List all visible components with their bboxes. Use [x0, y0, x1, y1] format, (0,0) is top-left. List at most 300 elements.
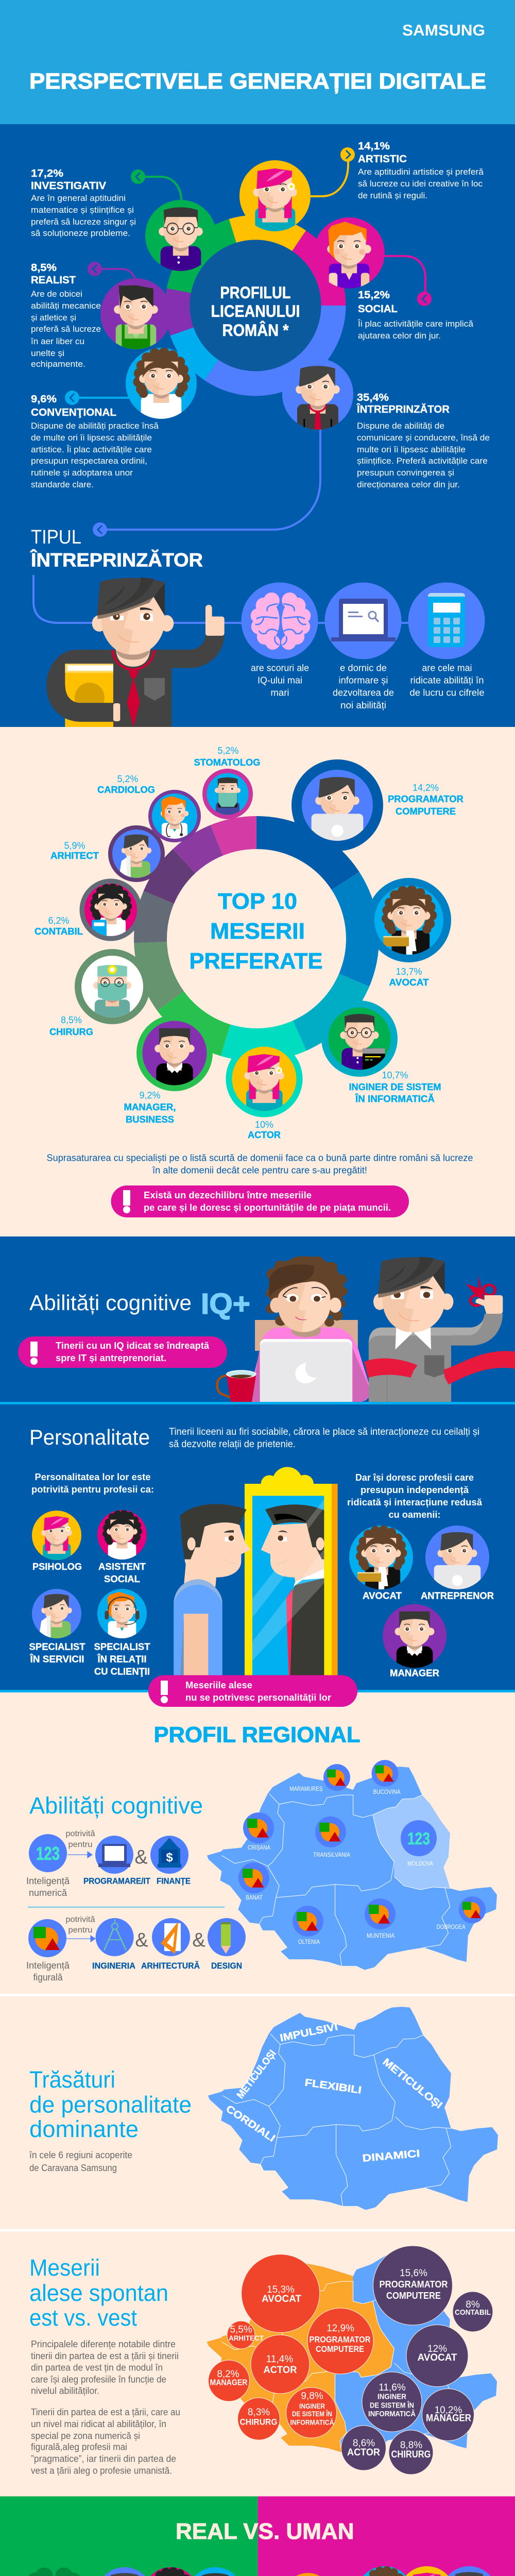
text block: investigativ: matematice și științifice și — [31, 205, 134, 215]
labels: bubbles east vest: 8,2% — [217, 2369, 239, 2380]
labels: top 10 occupations: 5,2% — [117, 774, 139, 784]
labels: bubbles east vest: CHIRURG — [240, 2417, 277, 2427]
text block: conventional: standarde clare. — [31, 480, 94, 489]
labels: top 10 occupations: AVOCAT — [389, 977, 429, 988]
label: inteligenta figurala: Inteligență — [26, 1960, 70, 1971]
icon: avatars uman — [356, 2566, 497, 2576]
text block: isi doresc profesii: ridicată și interacțiune redusă — [347, 1497, 483, 1507]
icon: avatar manager — [136, 1015, 213, 1092]
labels: bubbles east vest: DE SISTEM ÎN — [292, 2409, 332, 2418]
labels: top 10 occupations: 9,2% — [139, 1090, 161, 1100]
panel: profil regional abilitati cognitive — [0, 1692, 515, 1994]
icon: avatar contabil — [79, 879, 142, 941]
heading: trasaturi: de personalitate — [29, 2092, 192, 2117]
heading: meserii alese spontan: Meserii — [29, 2255, 100, 2281]
labels: bubbles east vest: CONTABIL — [455, 2308, 491, 2317]
text block: trait iq: are scoruri ale — [251, 663, 309, 673]
labels: profesii: AVOCAT — [363, 1591, 402, 1601]
text block: realist — [30, 262, 101, 369]
labels: bubbles east vest: AVOCAT — [417, 2352, 457, 2363]
labels: top 10 occupations: CHIRURG — [49, 1027, 93, 1037]
heading: tipul intreprinzator: ÎNTREPRINZĂTOR — [30, 549, 203, 571]
text block: potrivita pentru profesii — [31, 1472, 154, 1495]
map: east vs west — [207, 2253, 497, 2456]
text block: artistic: să lucreze cu idei creative în loc — [358, 179, 483, 189]
icon: IQ brain real — [21, 2568, 87, 2576]
heading: meserii alese spontan: est vs. vest — [29, 2304, 137, 2331]
labels: bubbles east vest: ACTOR — [347, 2447, 380, 2458]
text block: trait cifre: de lucru cu cifrele — [410, 687, 484, 698]
labels: bubbles east vest: 15,6% — [400, 2268, 427, 2279]
map: personality traits: METICULOȘI — [381, 2056, 444, 2111]
labels: top 10 occupations: 5,2% — [217, 745, 239, 756]
text block: diferente: tinerii din partea de est a țării și tinerii — [31, 2351, 179, 2361]
chart: east bubbles — [341, 2246, 493, 2475]
arrow: figural to jobs — [66, 1936, 95, 1942]
labels: top 10 occupations: ÎN INFORMATICĂ — [355, 1093, 435, 1104]
panel: header — [0, 0, 515, 124]
text block: diferente: Tinerii din partea de est a țării, care au — [31, 2407, 180, 2417]
labels: inginerie arhitectura design — [92, 1961, 242, 1971]
text block: intreprinzator: științifice. Preferă activitățile care — [357, 456, 488, 466]
map: romania cognitive regions: MARAMUREȘ — [289, 1785, 322, 1792]
icon: avatar cardiolog — [148, 790, 201, 843]
text block: social: Îi plac activitățile care implică — [357, 319, 474, 329]
labels: bubbles east vest: 15,3% — [267, 2284, 295, 2295]
text block: realist: preferă să lucreze — [31, 324, 101, 334]
labels: top 10 occupations: COMPUTERE — [396, 806, 456, 817]
text: potrivita pentru 2: pentru — [68, 1926, 93, 1935]
panel: trasaturi de personalitate — [0, 1996, 515, 2229]
map: romania cognitive regions: CRIȘANA — [248, 1844, 270, 1851]
labels: bubbles east vest: MANAGER — [210, 2379, 248, 2387]
icon: avatar avocat — [349, 1525, 413, 1596]
icon: avatar intreprinzator — [282, 359, 353, 436]
text block: diferente: un nivel mai ridicat al abilităților, în — [31, 2419, 166, 2429]
map: romania cognitive regions: BANAT — [246, 1894, 263, 1901]
text block: artistic — [358, 141, 484, 200]
labels: bubbles east vest: PROGRAMATOR — [309, 2334, 371, 2344]
text block: social: SOCIAL — [358, 303, 398, 315]
heading: meserii alese spontan — [29, 2255, 168, 2331]
text block: tinerii liceeni: Tinerii liceeni au firi sociabile, cărora le place să interacționeze cu ceilalți și — [169, 1427, 479, 1437]
icon: avatar social — [314, 217, 385, 296]
text block: intreprinzator: ÎNTREPRINZĂTOR — [356, 403, 450, 415]
chart: profile donut — [177, 228, 334, 383]
text block: realist: echipamente. — [31, 359, 85, 369]
text block: diferente: care își aleg profesiile în funcție de — [31, 2374, 166, 2384]
icon: programare laptop — [95, 1836, 133, 1874]
text block: trait iq — [251, 663, 309, 698]
heading: profilul liceanului — [211, 283, 300, 340]
text block: tinerii liceeni: să dezvolte relații de prietenie. — [169, 1439, 296, 1450]
arrow: connectors — [72, 155, 425, 530]
labels: profesii: MANAGER — [390, 1668, 439, 1679]
labels: top 10 occupations: 6,2% — [48, 916, 70, 926]
text block: trait informare: noi abilități — [340, 700, 386, 710]
label: inteligenta numerica: numerică — [29, 1888, 67, 1898]
text block: artistic: 14,1% — [358, 141, 390, 152]
text: potrivita pentru 1: potrivită — [66, 1829, 95, 1838]
heading: abilitati cognitive: Abilități cognitive — [29, 1792, 203, 1819]
labels: top 10 occupations: CONTABIL — [35, 926, 83, 937]
panel: top 10 meserii preferate — [0, 727, 515, 1236]
labels: bubbles east vest: DE SISTEM ÎN — [370, 2401, 414, 2410]
logo: Samsung: SAMSUNG — [402, 21, 485, 39]
panel: meserii alese spontan — [0, 2232, 515, 2497]
labels: profesii: ÎN SERVICII — [29, 1654, 84, 1664]
icon: avatar artistic — [239, 160, 311, 236]
panel: profilul liceanului român — [0, 124, 515, 727]
icon: marker realist — [88, 262, 102, 276]
text block: intreprinzator: comunicare și conducere, însă de — [357, 433, 490, 443]
text block: regiuni acoperite — [29, 2150, 132, 2173]
text block: suprasaturare: în alte domenii decât cele pentru care s-au pregătit! — [152, 1164, 367, 1176]
labels: top 10 occupations: BUSINESS — [126, 1114, 174, 1125]
labels: bubbles east vest: 12% — [427, 2344, 447, 2354]
icon: marker investigativ — [131, 170, 145, 184]
text block: trait cifre: ridicate abilități în — [410, 675, 484, 685]
callout: IT si antreprenoriat — [18, 1336, 227, 1368]
icon: mirror with man and reflection — [174, 1467, 338, 1699]
labels: profesii: SPECIALIST — [29, 1641, 85, 1652]
text block: realist: unelte și — [31, 348, 64, 358]
text block: conventional: 9,6% — [31, 394, 57, 405]
text block: social — [357, 290, 474, 341]
text: ampersand 1: & — [134, 1846, 148, 1868]
labels: bubbles east vest: COMPUTERE — [316, 2344, 364, 2354]
icon: inteligenta figurala — [28, 1919, 66, 1957]
text: potrivita pentru 2 — [66, 1916, 95, 1935]
heading: abilitati cognitive: Abilități cognitive — [29, 1291, 192, 1315]
text block: suprasaturare — [46, 1152, 473, 1176]
labels: top 10 occupations: MANAGER, — [124, 1102, 176, 1112]
map: romania cognitive regions: 123 — [407, 1829, 430, 1848]
heading: IQ+: IQ+ — [201, 1287, 250, 1320]
labels: bubbles east vest: 5,5% — [230, 2325, 252, 2335]
heading: profilul liceanului: PROFILUL — [220, 283, 290, 302]
text block: social: ajutarea celor din jur. — [358, 331, 441, 341]
text block: investigativ: preferă să lucreze singur și — [31, 217, 136, 227]
text block: realist: 8,5% — [31, 262, 57, 274]
labels: top 10 occupations: 5,9% — [64, 841, 85, 851]
icon: avatar programator — [291, 759, 383, 851]
icon: avatar stomatolog — [202, 769, 253, 819]
labels: bubbles east vest: ACTOR — [264, 2365, 297, 2376]
chart: west bubbles — [208, 2255, 373, 2440]
heading: trasaturi — [29, 2066, 192, 2142]
labels: programare finante — [83, 1877, 191, 1886]
icon: inginerie compass — [96, 1918, 134, 1956]
icon: avatar inginer — [321, 1001, 398, 1077]
labels: bubbles east vest: ARHITECT — [229, 2334, 264, 2342]
text block: tinerii liceeni — [169, 1427, 479, 1450]
text block: trait informare — [333, 663, 394, 710]
heading: profilul liceanului: LICEANULUI — [211, 302, 300, 320]
arrow: numeric to jobs — [67, 1852, 92, 1858]
icon: avatar actor — [226, 1040, 303, 1117]
icon: brain — [241, 582, 318, 659]
icon: avatar realist — [100, 278, 171, 357]
text block: isi doresc profesii: Dar își doresc profesii care — [355, 1472, 474, 1483]
text block: conventional: CONVENŢIONAL — [31, 407, 116, 418]
text: ampersand 2: & — [135, 1929, 148, 1951]
labels: bubbles east vest: INFORMATICĂ — [290, 2418, 334, 2427]
map: romania cognitive regions: BUCOVINA — [373, 1788, 401, 1795]
text block: conventional: presupun respectarea ordinii, — [31, 456, 147, 466]
labels: bubbles east vest: 8,3% — [248, 2407, 270, 2418]
labels: inginerie arhitectura design: INGINERIA — [92, 1961, 135, 1971]
labels: bubbles east vest: INGINER — [299, 2402, 325, 2410]
labels: top 10 occupations — [35, 745, 464, 1140]
icon: avatar psiholog — [32, 1511, 81, 1564]
text block: trait informare: informare și — [339, 675, 388, 685]
labels: bubbles east vest: 8% — [466, 2299, 480, 2310]
arrow: line through traits — [33, 575, 408, 623]
text block: investigativ: Are în general aptitudini — [31, 193, 126, 203]
heading: real vs uman: REAL VS. UMAN — [176, 2519, 354, 2544]
panel: real vs uman — [0, 2496, 515, 2576]
icon: avatar chirurg — [75, 949, 150, 1024]
labels: bubbles east vest: 9,8% — [301, 2391, 323, 2402]
text block: realist: în aer liber cu — [30, 336, 84, 346]
labels: bubbles east vest: 11,6% — [379, 2382, 406, 2393]
callout: IT si antreprenoriat: Tinerii cu un IQ idicat se îndreaptă — [56, 1341, 210, 1351]
icon: avatar investigativ — [145, 200, 216, 275]
labels: profesii — [29, 1562, 494, 1679]
map: personality traits: FLEXIBILI — [304, 2077, 362, 2096]
labels: top 10 occupations: 13,7% — [396, 967, 422, 977]
heading: trasaturi: dominante — [29, 2116, 139, 2142]
icon: design pencil — [208, 1918, 246, 1956]
labels: bubbles east vest: 8,8% — [400, 2440, 422, 2451]
title: PERSPECTIVELE GENERAȚIEI DIGITALE — [29, 69, 486, 94]
map: romania cognitive regions: MOLDOVA — [407, 1860, 433, 1867]
labels: inginerie arhitectura design: DESIGN — [211, 1961, 242, 1971]
labels: top 10 occupations: ACTOR — [248, 1130, 281, 1140]
icon: avatar specialist relatii clienti — [97, 1589, 147, 1643]
heading: tipul intreprinzator: TIPUL — [31, 527, 81, 548]
map: romania cognitive regions: OLTENIA — [298, 1938, 320, 1945]
labels: bubbles east vest: 10,2% — [435, 2405, 462, 2416]
labels: top 10 occupations: PROGRAMATOR — [388, 794, 464, 804]
icon: avatar arhitect — [108, 825, 165, 882]
text block: conventional: Dispune de abilități practice însă — [31, 421, 159, 431]
labels: bubbles east vest: 11,4% — [266, 2354, 293, 2365]
text block: trait informare: dezvoltarea de — [333, 687, 394, 698]
labels: programare finante: PROGRAMARE/IT — [83, 1877, 150, 1886]
panel: abilitati cognitive iq — [0, 1236, 515, 1404]
text block: isi doresc profesii: presupun independență — [360, 1485, 469, 1495]
icon: arhitectura triangle — [152, 1918, 190, 1956]
panel: personalitate — [0, 1404, 515, 1699]
labels: profesii: ÎN RELAȚII — [97, 1654, 146, 1664]
text block: conventional: de multe ori îi lipsesc abilitățile — [31, 433, 152, 443]
callout: meseriile alese — [148, 1675, 357, 1707]
text block: trait cifre — [410, 663, 484, 698]
labels: profesii: PSIHOLOG — [32, 1562, 82, 1572]
labels: top 10 occupations: STOMATOLOG — [194, 757, 261, 768]
icon: marker social — [417, 292, 432, 306]
text block: diferente: din partea de vest țin de modul în — [31, 2363, 163, 2373]
heading: profilul liceanului: ROMÂN * — [222, 321, 289, 340]
text: potrivita pentru 1: pentru — [68, 1840, 93, 1849]
labels: bubbles east vest: 12,9% — [327, 2323, 354, 2334]
labels: bubbles east vest: CHIRURG — [391, 2449, 431, 2460]
text block: social: 15,2% — [358, 290, 390, 301]
text block: investigativ: INVESTIGATIV — [31, 180, 107, 192]
callout: IT si antreprenoriat: spre IT și antreprenoriat. — [56, 1353, 166, 1363]
text block: intreprinzator: 35,4% — [357, 392, 389, 403]
icon: marker artistic — [340, 147, 355, 162]
text: potrivita pentru 1 — [66, 1829, 95, 1849]
labels: bubbles east vest: MANAGER — [426, 2413, 471, 2424]
heading: trasaturi: Trăsături — [29, 2066, 115, 2093]
text block: regiuni acoperite: de Caravana Samsung — [29, 2163, 117, 2173]
icon: man cutting ribbon — [364, 1257, 515, 1402]
labels: profesii: CU CLIENŢII — [94, 1666, 150, 1676]
text block: artistic: de rutină și reguli. — [358, 191, 427, 200]
callout: dezechilibru: Există un dezechilibru între meseriile — [144, 1190, 312, 1200]
heading: personalitate: Personalitate — [29, 1425, 150, 1449]
text block: diferente: special pe zona numerică și — [31, 2431, 140, 2441]
text block: isi doresc profesii — [347, 1472, 483, 1520]
text block: diferente: Principalele diferențe notabile dintre — [31, 2339, 176, 2349]
text block: potrivita pentru profesii: potrivită pentru profesii ca: — [31, 1484, 154, 1495]
text block: suprasaturare: Suprasaturarea cu specialiști pe o listă scurtă de domenii face ca o bună parte dintre români să lucreze — [46, 1152, 473, 1163]
text block: regiuni acoperite: în cele 6 regiuni acoperite — [29, 2150, 132, 2160]
labels: bubbles east vest — [210, 2268, 491, 2460]
callout: dezechilibru — [111, 1185, 409, 1217]
text block: realist: și atletice și — [31, 313, 76, 323]
labels: profesii: ANTREPRENOR — [421, 1591, 494, 1601]
labels: top 10 occupations: 14,2% — [413, 783, 439, 793]
map: romania cognitive regions: TRANSILVANIA — [313, 1851, 350, 1858]
callout: meseriile alese: nu se potrivesc personalității lor — [185, 1692, 331, 1703]
icon: marker conventional — [65, 391, 79, 405]
heading: tipul intreprinzator — [30, 527, 203, 571]
text block: conventional: rutinele și adoptarea unor — [31, 468, 133, 478]
text: ampersand 3: & — [192, 1929, 205, 1951]
text block: realist: Are de obicei — [31, 289, 82, 299]
text block: intreprinzator: multe ori îi lipsesc abilitățile — [357, 445, 466, 454]
icon: inteligenta numerica — [29, 1834, 67, 1872]
label: inteligenta numerica — [26, 1876, 70, 1898]
icon: laptop — [324, 582, 402, 659]
text block: realist: abilități mecanice — [31, 301, 101, 311]
labels: top 10 occupations: ARHITECT — [50, 851, 99, 861]
text block: realist: REALIST — [31, 275, 76, 286]
icon: finante bank — [150, 1836, 188, 1874]
labels: top 10 occupations: 8,5% — [61, 1015, 82, 1025]
heading: top 10: TOP 10 — [218, 889, 297, 914]
map: personality traits: DINAMICI — [362, 2148, 420, 2164]
icon: avatar manager — [383, 1604, 447, 1675]
labels: bubbles east vest: PROGRAMATOR — [379, 2279, 448, 2290]
labels: top 10 occupations: 10% — [255, 1120, 273, 1130]
text block: diferente: ”pragmatice”, iar tinerii din partea de — [31, 2454, 176, 2464]
icon: inteligenta numerica: 123 — [36, 1843, 60, 1864]
labels: inginerie arhitectura design: ARHITECTURĂ — [141, 1961, 200, 1971]
map: romania cognitive regions: DOBROGEA — [437, 1923, 466, 1930]
icon: marker intreprinzator — [93, 522, 107, 537]
labels: top 10 occupations: INGINER DE SISTEM — [349, 1082, 441, 1092]
label: inteligenta figurala — [26, 1960, 70, 1982]
text block: conventional: artistice. Îi plac activitățile care — [31, 445, 152, 454]
heading: profil regional: PROFIL REGIONAL — [153, 1723, 360, 1748]
icon: avatar avocat — [367, 878, 451, 962]
map: personality traits — [208, 2007, 498, 2210]
map: romania cognitive regions: MUNTENIA — [367, 1932, 394, 1939]
labels: profesii: ASISTENT — [98, 1562, 146, 1572]
text block: intreprinzator: Dispune de abilități de — [357, 421, 444, 431]
callout: meseriile alese: Meseriile alese — [185, 1680, 252, 1690]
labels: profesii: SOCIAL — [104, 1574, 140, 1584]
icon: smiley uman — [284, 2573, 332, 2576]
heading: top 10: MESERII — [210, 919, 305, 944]
icon: big entrepreneur character — [46, 578, 225, 727]
heading: top 10: PREFERATE — [190, 948, 322, 974]
heading: meserii alese spontan: alese spontan — [29, 2280, 168, 2306]
icon: woman with laptop — [217, 1256, 371, 1402]
labels: bubbles east vest: COMPUTERE — [386, 2291, 441, 2301]
icon: calculator — [408, 582, 485, 659]
text block: trait informare: e dornic de — [340, 663, 387, 673]
icon: avatars real — [96, 2567, 244, 2576]
labels: bubbles east vest: INGINER — [377, 2393, 406, 2401]
icon: finante bank: $ — [166, 1851, 173, 1865]
map: personality traits: IMPULSIVI — [279, 2021, 339, 2044]
map: romania cognitive regions — [207, 1760, 497, 1970]
label: inteligenta numerica: Inteligență — [26, 1876, 70, 1886]
labels: bubbles east vest: INFORMATICĂ — [368, 2410, 416, 2418]
labels: top 10 occupations: 10,7% — [382, 1070, 408, 1080]
text block: diferente: nivelul abilităților. — [31, 2385, 99, 2396]
icon: avatar antreprenor — [425, 1526, 489, 1594]
labels: programare finante: FINANȚE — [157, 1877, 191, 1886]
text block: artistic: Are aptitudini artistice și preferă — [358, 167, 484, 177]
icon: avatar asistent social — [97, 1510, 147, 1565]
text block: isi doresc profesii: cu oamenii: — [388, 1510, 441, 1520]
text block: trait iq: mari — [271, 687, 289, 698]
labels: bubbles east vest: AVOCAT — [262, 2294, 301, 2304]
text block: investigativ — [31, 168, 136, 238]
map: personality traits: METICULOȘI — [235, 2048, 279, 2101]
text block: artistic: ARTISTIC — [358, 154, 407, 165]
callout: dezechilibru: pe care și le doresc și oportunitățile de pe piața muncii. — [144, 1202, 391, 1213]
text block: trait iq: IQ-ului mai — [258, 675, 302, 685]
map: personality traits: CORDIALI — [224, 2103, 277, 2144]
text block: intreprinzator: direcționarea celor din jur. — [357, 480, 460, 489]
text block: diferente: figurală,aleg profesii mai — [31, 2442, 127, 2452]
text: potrivita pentru 2: potrivită — [66, 1916, 95, 1924]
heading: top 10 — [190, 889, 322, 974]
label: inteligenta figurala: figurală — [33, 1972, 63, 1982]
text block: intreprinzator: presupun convingerea și — [357, 468, 454, 478]
labels: profesii: SPECIALIST — [94, 1641, 150, 1652]
icon: avatar conventional — [126, 347, 197, 426]
labels: bubbles east vest: 8,6% — [353, 2438, 375, 2449]
text block: investigativ: să soluționeze probleme. — [31, 228, 130, 238]
text block: conventional — [31, 394, 159, 489]
labels: top 10 occupations: CARDIOLOG — [97, 785, 155, 795]
icon: avatar specialist servicii — [32, 1589, 81, 1641]
text block: intreprinzator — [356, 392, 490, 489]
text block: trait cifre: are cele mai — [422, 663, 472, 673]
text block: diferente — [31, 2339, 180, 2476]
text block: diferente: vest a țării aleg o profesie umanistă. — [31, 2466, 172, 2476]
text block: potrivita pentru profesii: Personalitatea lor lor este — [35, 1472, 150, 1482]
